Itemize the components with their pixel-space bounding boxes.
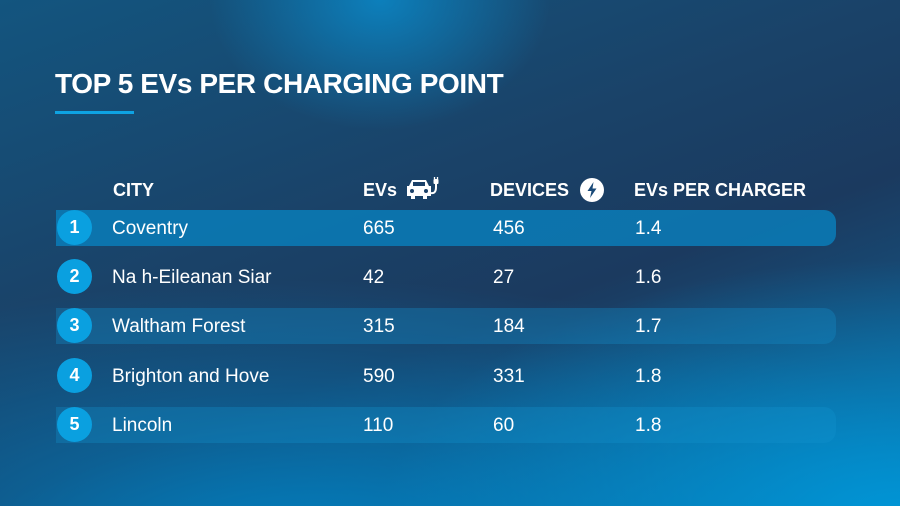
- rank circle: [57, 259, 92, 294]
- row 4: 590: [363, 366, 395, 387]
- row 5: 1.8: [635, 415, 661, 436]
- rank circle: [57, 407, 92, 442]
- row 3: 1.7: [635, 316, 661, 337]
- row text: [112, 218, 661, 239]
- row 1: 1.4: [635, 218, 661, 239]
- rank circle: [57, 358, 92, 393]
- row 1: Coventry: [112, 218, 188, 239]
- row 3: Waltham Forest: [112, 316, 245, 337]
- row 2: 1.6: [635, 267, 661, 288]
- header: EVs per charger: EVs PER CHARGER: [634, 180, 806, 200]
- row 1: 665: [363, 218, 395, 239]
- row 4: 331: [493, 366, 525, 387]
- row text: [112, 415, 661, 436]
- row 5: 60: [493, 415, 514, 436]
- row 5: 110: [363, 415, 393, 436]
- row 4: Brighton and Hove: [112, 366, 269, 387]
- icon: lightning bolt: [580, 178, 604, 202]
- rank circle: [57, 210, 92, 245]
- header: EVs with car icon: [363, 177, 438, 200]
- title underline: [55, 111, 134, 114]
- rank circle: 5: [69, 414, 80, 434]
- row band: [56, 308, 836, 344]
- header: devices with bolt icon: [490, 178, 604, 202]
- row 1: [56, 210, 836, 246]
- row 3: 184: [493, 316, 525, 337]
- header: city: CITY: [113, 180, 154, 200]
- rank circle: 2: [69, 266, 80, 286]
- rank circle: 3: [69, 315, 80, 335]
- row 2: 27: [493, 267, 514, 288]
- row 2: [57, 259, 661, 294]
- rank circle: 4: [69, 365, 80, 385]
- icon: car with plug: [407, 177, 438, 199]
- row 5: [56, 407, 818, 443]
- row 4: 1.8: [635, 366, 661, 387]
- row 2: 42: [363, 267, 384, 288]
- rank circle: [57, 308, 92, 343]
- row text: [112, 267, 661, 288]
- header: devices with bolt icon: DEVICES: [490, 180, 569, 200]
- header: EVs with car icon: EVs: [363, 180, 397, 200]
- row 3: [56, 308, 836, 344]
- row 1: 456: [493, 218, 525, 239]
- row text: [112, 366, 661, 387]
- title: TOP 5 EVs PER CHARGING POINT: [55, 68, 503, 99]
- row 2: Na h-Eileanan Siar: [112, 267, 271, 288]
- row text: [112, 316, 661, 337]
- row 4: [57, 358, 661, 393]
- rank circle: 1: [69, 217, 80, 237]
- row 5: Lincoln: [112, 415, 172, 436]
- row 3: 315: [363, 316, 395, 337]
- row band: [56, 407, 836, 443]
- row band: [56, 210, 836, 246]
